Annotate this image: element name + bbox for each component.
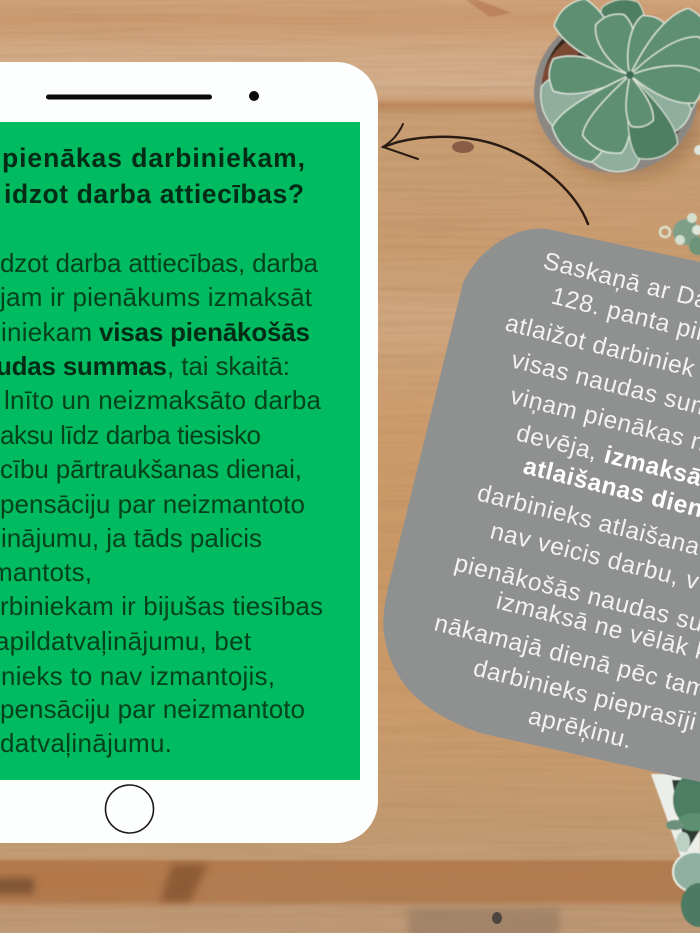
text block: grey callout law text [432,248,700,755]
text block: grey callout law text: darbinieks pieprasīji [471,655,699,736]
text block: employer obligations: nieks to nav izmantojis, [1,661,275,691]
text block: employer obligations: visas pienākošās [99,317,310,347]
text block: grey callout law text: devēja, izmaksā [514,420,700,492]
text block: employer obligations: inājumu, ja tāds palicis [1,523,262,553]
text block: employer obligations: rbiniekam ir bijušas tiesības [0,591,323,621]
heading: phone screen: idzot darba attiecības? [4,179,304,209]
text block: employer obligations: apildatvaļinājumu, bet [0,626,252,656]
icon: potted plant, bottom right [651,774,700,927]
text block: employer obligations: aksu līdz darba tiesisko [0,420,261,450]
phone speaker [46,94,212,100]
heading: phone screen [2,143,305,209]
arrow: from grey callout to phone [383,124,588,224]
text block: employer obligations: , tai skaitā: [167,351,290,381]
icon: succulent in pot, top right [533,0,700,178]
text block: employer obligations: pensāciju par neizmantoto [0,489,305,519]
phone camera [249,91,259,101]
heading: phone screen: pienākas darbiniekam, [2,143,305,173]
phone: white frame [0,62,378,843]
text block: grey callout law text: aprēķinu. [526,703,635,755]
text block: grey callout law text: nav veicis darbu, v [488,518,700,596]
icon: small light plant, right edge [660,145,700,255]
text block: grey callout law text: atlaižot darbiniek [503,310,698,383]
text block: employer obligations: datvaļinājumu. [0,728,172,758]
text block: employer obligations: lnīto un neizmaksāto darba [4,385,322,415]
text block: employer obligations: jam ir pienākums izmaksāt [0,282,313,312]
text block: grey callout law text: pienākošās naudas su [452,550,700,638]
text block: employer obligations [0,248,323,758]
panel: green phone screen [0,122,360,780]
text block: employer obligations: udas summas [0,351,167,381]
text block: employer obligations: pensāciju par neizmantoto [0,694,305,724]
text block: grey callout law text: darbinieks atlaišana [475,480,700,561]
text block: employer obligations: dzot darba attiecības, darba [0,248,319,278]
phone home button [106,785,154,833]
text block: employer obligations: cību pārtraukšanas dienai, [0,454,302,484]
text block: employer obligations: iniekam [1,317,92,347]
panel: grey rotated callout [383,229,700,782]
